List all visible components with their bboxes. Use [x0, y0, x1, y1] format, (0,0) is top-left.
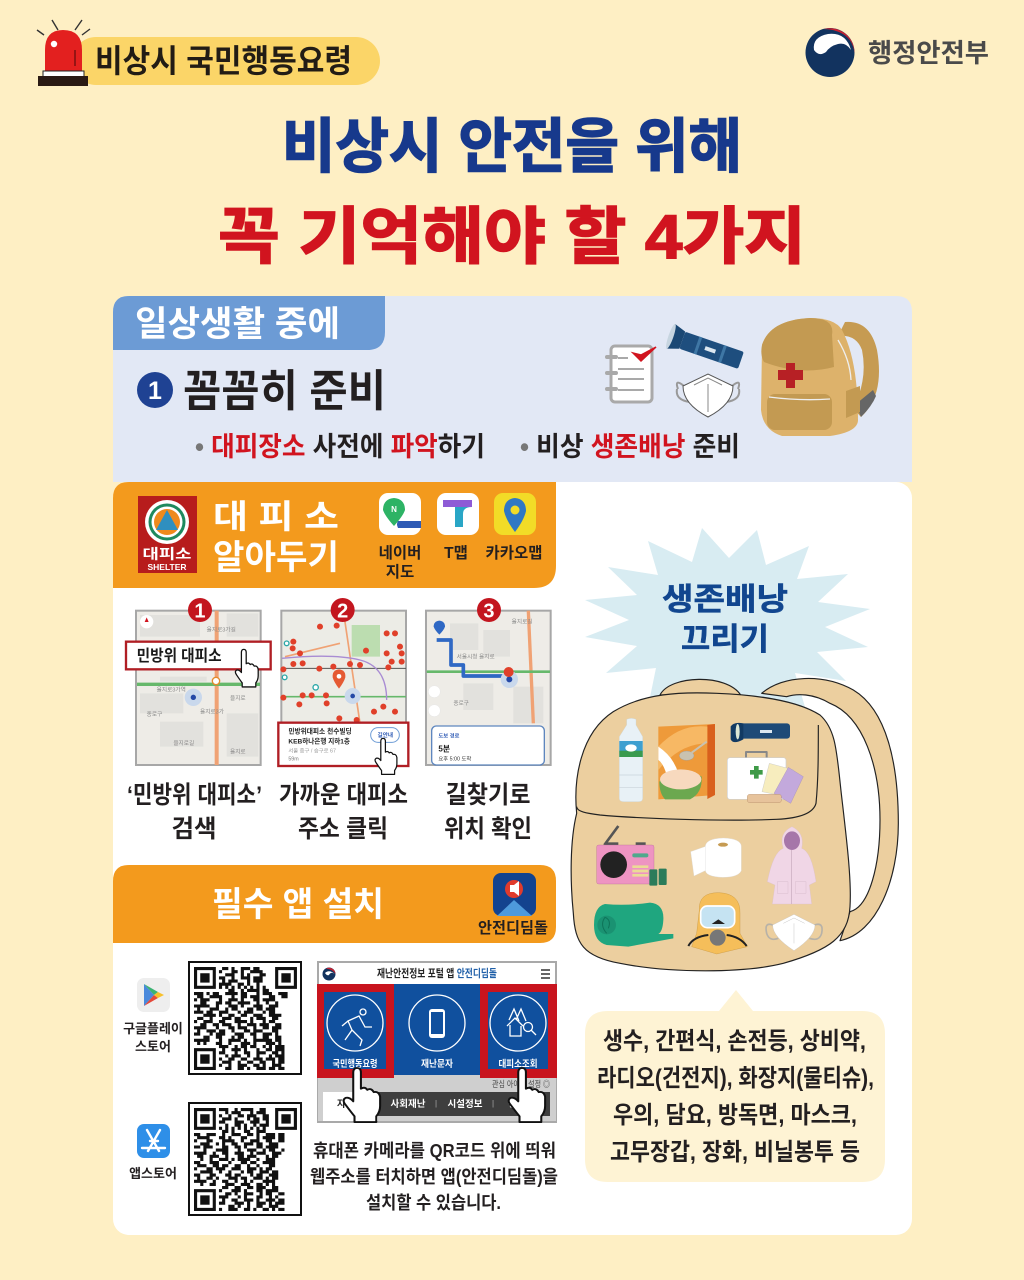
backpack handle [660, 679, 741, 695]
menu item: disaster text [409, 995, 465, 1070]
tab bar: 자연재난 [337, 1098, 372, 1110]
tab: in daily life: 일상생활 중에 [135, 305, 340, 344]
step number 2: 2 [337, 600, 348, 622]
caption step 3 line 1: 길찾기로 [446, 781, 530, 809]
red highlight: shelter search [480, 984, 557, 1078]
item: sleeping mat [594, 903, 673, 947]
item: toilet paper [691, 838, 741, 877]
caption step 3 line 2: 위치 확인 [444, 815, 532, 843]
item: face mask [766, 914, 822, 951]
app icon: Naver Map [379, 493, 421, 535]
icon: red siren [37, 20, 90, 86]
app icon: Kakao Map [494, 493, 536, 535]
bullet: know shelter locations: • 대피장소 사전에 파악하기 [195, 432, 485, 462]
icon: App Store [137, 1124, 170, 1158]
step number 3 [477, 598, 501, 622]
icon: shelter sign: SHELTER [147, 562, 187, 572]
step 3 map: walking route: 을지로길 [512, 617, 532, 625]
icon: Google Play store [137, 978, 170, 1012]
speech box: survival bag contents [585, 990, 885, 1182]
step 3 map: walking route: 서울시청 을지로 [457, 652, 495, 660]
app icon: T map [437, 493, 479, 535]
QR install instructions [310, 1141, 558, 1213]
panel: white content area [113, 482, 912, 1235]
hand pointer [235, 649, 258, 687]
app label: T map: T맵 [444, 544, 468, 562]
starburst heading: 생존배낭 [662, 582, 788, 617]
app label: Naver Map: 지도 [386, 563, 414, 581]
step 1 map: search: 을지로 [230, 747, 246, 755]
caption step 2 line 2: 주소 클릭 [298, 815, 388, 843]
step 2 map: nearby shelters [278, 611, 408, 774]
menu item: action guide [327, 995, 383, 1070]
icon: checklist [607, 346, 656, 402]
menu icon [541, 970, 550, 978]
step number 1: 1 [194, 600, 206, 622]
contents line 2: 라디오(건전지), 화장지(물티슈), [597, 1065, 874, 1092]
portal logo [322, 968, 336, 980]
tab bar: 사회재난 [391, 1098, 426, 1110]
step 1 map: search: 을지로 [230, 694, 246, 702]
band heading: know in advance: 알아두기 [213, 539, 339, 577]
tab bar: | [492, 1099, 494, 1108]
starburst heading line 2: 끄리기 [681, 622, 769, 657]
step 1 map: search: 을지로길 [173, 739, 194, 747]
hand pointer [375, 738, 397, 774]
backpack strap [762, 678, 898, 941]
portal header text: 재난안전정보 포털 앱 안전디딤돌 [377, 966, 497, 980]
app label: Kakao Map: 카카오맵 [486, 544, 542, 562]
QR code: Google Play [189, 962, 301, 1074]
shelter info card: KEB하나은행 지하1층 [288, 736, 350, 745]
route card: 5분 [438, 744, 450, 753]
band: install the required app [113, 865, 556, 943]
step 3 map: walking route: 종로구 [453, 700, 469, 707]
step number 3: 3 [483, 600, 495, 622]
step 1 map: search: 을지로3가 [200, 707, 225, 715]
tab bar: | [435, 1099, 437, 1108]
icon: shelter sign [138, 496, 197, 573]
step 3 map: walking route [426, 611, 551, 765]
step number 1 [188, 598, 212, 622]
backpack body [571, 693, 850, 971]
menu item: action guide: 국민행동요령 [332, 1058, 378, 1070]
app icon: Naver Map: N [391, 505, 397, 514]
app label: Naver Map: 네이버 [379, 544, 421, 562]
icon: taegeuk emblem [806, 28, 855, 77]
band: know your shelter [113, 482, 556, 588]
menu item: shelter search: 대피소조회 [498, 1058, 538, 1070]
step captions [127, 781, 532, 843]
title line 2: 꼭 기억해야 할 4가지 [218, 203, 806, 272]
number badge 1 [137, 372, 173, 408]
instructions line 2: 웹주소를 터치하면 앱(안전디딤돌)을 [310, 1167, 558, 1187]
item: first aid kit [727, 752, 803, 803]
search box [126, 642, 271, 669]
title line 1: 비상시 안전을 위해 [282, 114, 742, 180]
starburst callout: packing a survival bag [585, 528, 870, 707]
shelter info card: 서울 중구 / 승구로 67 [288, 747, 336, 755]
header badge: emergency action guide [37, 20, 380, 86]
instructions line 3: 설치할 수 있습니다. [366, 1193, 501, 1213]
title [218, 114, 806, 272]
route card: 도보 경로 [438, 732, 460, 740]
tab: in daily life [113, 296, 385, 350]
caption step 2 line 1: 가까운 대피소 [279, 781, 408, 809]
contents line 4: 고무장갑, 장화, 비닐봉투 등 [610, 1139, 860, 1166]
step 1 map: search: 종로구 [147, 711, 162, 718]
interest settings text: 관심 아이콘 설정 ◎ [492, 1079, 550, 1089]
map step screenshots [126, 598, 551, 774]
instructions line 1: 휴대폰 카메라를 QR코드 위에 띄워 [313, 1141, 556, 1161]
app icon: safety stepping stone [493, 873, 536, 916]
contents line 3: 우의, 담요, 방독면, 마스크, [613, 1102, 857, 1129]
app name label: 안전디딤돌 [478, 919, 548, 937]
menu item: disaster text: 재난문자 [421, 1058, 453, 1070]
item: cereal box [658, 724, 715, 799]
panel: everyday preparation [113, 296, 912, 482]
ministry name: 행정안전부 [868, 38, 989, 68]
item: radio [597, 826, 667, 886]
ministry logo [806, 28, 989, 77]
item: flashlight [731, 723, 790, 742]
item: raincoat [767, 827, 816, 904]
step 1 map: search: 을지로3가역 [157, 686, 186, 694]
icon: face mask [677, 374, 739, 417]
route card [432, 726, 544, 765]
step 1 map: search [126, 611, 271, 765]
icon: flashlight [664, 323, 745, 373]
shelter info card [278, 723, 408, 766]
hand pointer left [344, 1068, 380, 1122]
number badge 1: 1 [148, 377, 162, 405]
top pocket flap [577, 725, 818, 820]
route card: 요후 5:00 도착 [438, 755, 471, 763]
caption step 1 line 1: ‘민방위 대피소’ [127, 781, 262, 809]
shelter info card: 길안내 [378, 731, 393, 739]
tab bar: 생활안전 [508, 1098, 543, 1110]
label: App Store: 앱스토어 [129, 1166, 177, 1181]
step 1 map: search: 을지로3가길 [207, 626, 236, 634]
item: water bottle [619, 718, 643, 802]
QR code: App Store [189, 1103, 301, 1215]
bullet: prepare survival bag: • 비상 생존배낭 준비 [520, 432, 740, 462]
hand pointer right [509, 1068, 545, 1122]
band heading: 필수 앱 설치 [212, 886, 384, 924]
tab bar: 시설정보 [448, 1098, 483, 1110]
caption step 1 line 2: 검색 [171, 815, 217, 843]
illustration: backpack with supplies [571, 678, 898, 971]
app portal screenshot [317, 962, 557, 1122]
heading: thorough preparation: 꼼꼼히 준비 [183, 367, 386, 416]
icon: emergency backpack [761, 318, 879, 436]
icon: shelter sign: 대피소 [142, 546, 192, 562]
shelter info card: 59m [288, 757, 299, 763]
tab bar [323, 1092, 550, 1121]
label: Google Play store: 스토어 [135, 1039, 171, 1054]
menu item: shelter search [490, 995, 546, 1070]
item: gas mask hood [688, 893, 747, 954]
step number 2 [331, 598, 355, 622]
label: Google Play store: 구글플레이 [123, 1021, 183, 1036]
search box: 민방위 대피소 [137, 647, 222, 665]
header badge text: 비상시 국민행동요령 [95, 43, 352, 79]
red highlight: action guide [317, 984, 394, 1078]
contents line 1: 생수, 간편식, 손전등, 상비약, [603, 1028, 866, 1055]
shelter info card: 민방위대피소 천수빌딩 [288, 726, 352, 735]
band heading: shelter: 대 피 소 [213, 498, 339, 535]
blue menu area [318, 984, 556, 1075]
